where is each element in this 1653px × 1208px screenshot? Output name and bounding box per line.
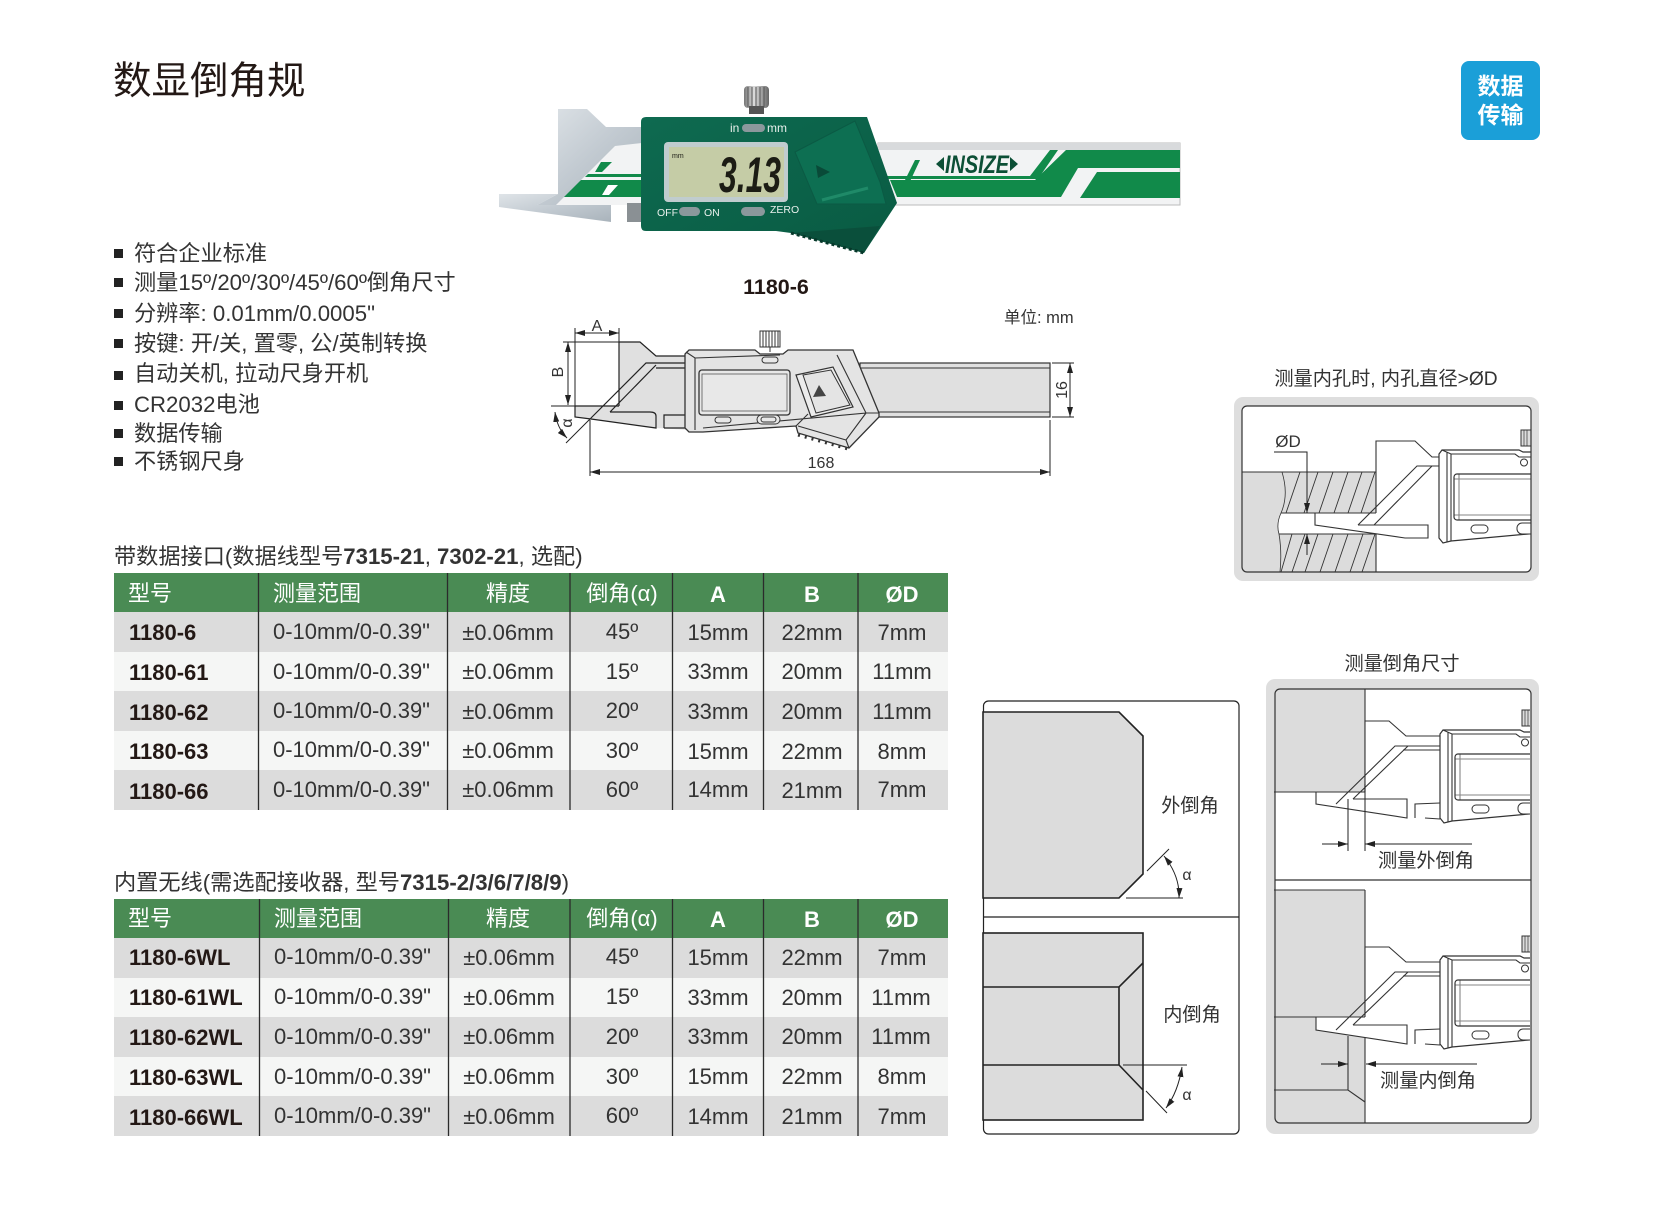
row 1180-63: 1180-63: [129, 739, 209, 764]
row 1180-66: 7mm: [878, 777, 926, 802]
panel: bore measurement: ØD: [1275, 432, 1301, 451]
LCD reading: 3.13: [719, 147, 781, 203]
table 2 header: 精度: [486, 906, 530, 931]
row 1180-66WL: ±0.06mm: [463, 1104, 555, 1129]
dimension drawing: A: [592, 318, 603, 335]
row 1180-66WL: 0-10mm/0-0.39": [274, 1103, 431, 1128]
feature list: 数据传输: [134, 421, 223, 446]
table 2 header: 倒角(α): [586, 906, 658, 931]
row 1180-6: 1180-6: [129, 620, 196, 645]
product photo: digital chamfer gauge: ON: [704, 207, 720, 219]
table caption 2: 内置无线(需选配接收器, 型号7315-2/3/6/7/8/9): [114, 870, 569, 895]
table 1 header: 精度: [486, 581, 530, 606]
row 1180-61WL: 15º: [606, 984, 638, 1009]
panel: outer and inner chamfer diagrams: α: [1182, 1087, 1192, 1104]
table 1: data interface models: [114, 573, 948, 810]
panel: outer and inner chamfer diagrams: α: [1182, 867, 1192, 884]
table 1 header: 倒角(α): [586, 581, 658, 606]
row 1180-66WL: 14mm: [687, 1104, 749, 1129]
row 1180-6: 45º: [606, 619, 638, 644]
row 1180-6: [129, 619, 926, 645]
row 1180-61: 20mm: [781, 659, 843, 684]
row 1180-62WL: ±0.06mm: [463, 1024, 555, 1049]
row 1180-62: 20º: [606, 698, 638, 723]
row 1180-66: 14mm: [687, 777, 749, 802]
row 1180-63WL: 22mm: [781, 1064, 843, 1089]
panel caption: bore measurement: 测量内孔时, 内孔直径>ØD: [1274, 368, 1498, 390]
label: measure outer chamfer: 测量外倒角: [1378, 850, 1474, 872]
label: outer chamfer: 外倒角: [1161, 795, 1219, 817]
row 1180-62: 20mm: [781, 699, 843, 724]
table 2 header: B: [804, 907, 820, 932]
dimension drawing: [550, 318, 1074, 476]
row 1180-6WL: 45º: [606, 944, 638, 969]
row 1180-62: 11mm: [872, 699, 932, 724]
row 1180-66: ±0.06mm: [462, 777, 554, 802]
feature list: 测量15º/20º/30º/45º/60º倒角尺寸: [134, 270, 456, 295]
table 2 header: A: [710, 907, 726, 932]
label: inner chamfer: 内倒角: [1163, 1004, 1221, 1026]
row 1180-61: 1180-61: [129, 660, 209, 685]
feature list: [114, 241, 456, 474]
table 1 header: A: [710, 582, 726, 607]
dimension drawing: 16: [1054, 381, 1071, 399]
row 1180-6WL: [129, 944, 926, 970]
product photo: digital chamfer gauge: mm: [672, 153, 684, 160]
title: 数显倒角规: [113, 60, 306, 103]
row 1180-6: ±0.06mm: [462, 620, 554, 645]
table 2 header: 测量范围: [274, 906, 362, 931]
label: measure inner chamfer: 测量内倒角: [1380, 1070, 1476, 1092]
row 1180-66: [129, 777, 926, 804]
feature list: 分辨率: 0.01mm/0.0005": [134, 301, 375, 326]
table 1 header: 测量范围: [273, 581, 361, 606]
row 1180-66: 60º: [606, 777, 638, 802]
product model label: 1180-6: [743, 275, 809, 299]
row 1180-63: 15mm: [687, 739, 749, 764]
row 1180-62WL: [129, 1024, 931, 1050]
dimension drawing: B: [550, 367, 567, 377]
row 1180-66: 0-10mm/0-0.39": [273, 777, 430, 802]
table 1 header: [128, 581, 918, 607]
row 1180-63: ±0.06mm: [462, 738, 554, 763]
row 1180-62: 33mm: [687, 699, 749, 724]
product photo: digital chamfer gauge: ZERO: [770, 204, 799, 216]
table 1 header: 型号: [128, 581, 172, 606]
row 1180-61: ±0.06mm: [462, 659, 554, 684]
row 1180-61WL: 1180-61WL: [129, 985, 243, 1010]
row 1180-6: 15mm: [687, 620, 749, 645]
row 1180-6WL: 7mm: [878, 945, 926, 970]
row 1180-62WL: 20mm: [781, 1024, 843, 1049]
product photo: digital chamfer gauge: in: [730, 121, 739, 135]
row 1180-61: [129, 659, 932, 685]
brand logo: INSIZE: [945, 151, 1010, 179]
row 1180-62WL: 33mm: [687, 1024, 749, 1049]
feature list: 不锈钢尺身: [134, 449, 245, 474]
row 1180-63WL: ±0.06mm: [463, 1064, 555, 1089]
feature list: 按键: 开/关, 置零, 公/英制转换: [134, 331, 427, 356]
badge: data transfer: [1461, 61, 1540, 140]
unit label: 单位: mm: [1004, 308, 1074, 327]
row 1180-66: 1180-66: [129, 779, 209, 804]
row 1180-61: 15º: [606, 659, 638, 684]
panel: measuring chamfer size: [1266, 679, 1540, 1134]
row 1180-62: 1180-62: [129, 700, 209, 725]
row 1180-63: 8mm: [878, 739, 926, 764]
dimension drawing: α: [559, 418, 576, 428]
product photo: digital chamfer gauge: mm: [767, 121, 787, 135]
row 1180-6: 7mm: [878, 620, 926, 645]
row 1180-62WL: 20º: [606, 1024, 638, 1049]
feature list: CR2032电池: [134, 392, 260, 417]
row 1180-63WL: 15mm: [687, 1064, 749, 1089]
row 1180-61: 33mm: [687, 659, 749, 684]
row 1180-63: 30º: [606, 738, 638, 763]
row 1180-66WL: 60º: [606, 1103, 638, 1128]
row 1180-61: 0-10mm/0-0.39": [273, 659, 430, 684]
row 1180-61WL: 11mm: [871, 985, 931, 1010]
row 1180-62WL: 0-10mm/0-0.39": [274, 1024, 431, 1049]
row 1180-66: 21mm: [781, 778, 843, 803]
row 1180-66WL: 1180-66WL: [129, 1105, 243, 1130]
row 1180-66WL: 7mm: [878, 1104, 926, 1129]
product photo: digital chamfer gauge: [499, 86, 1180, 253]
row 1180-62WL: 1180-62WL: [129, 1025, 243, 1050]
row 1180-6WL: 15mm: [687, 945, 749, 970]
row 1180-63WL: 8mm: [878, 1064, 926, 1089]
row 1180-6: 22mm: [781, 620, 843, 645]
product photo: digital chamfer gauge: OFF: [657, 207, 678, 219]
row 1180-6WL: 0-10mm/0-0.39": [274, 944, 431, 969]
row 1180-61WL: ±0.06mm: [463, 985, 555, 1010]
row 1180-6WL: 1180-6WL: [129, 945, 230, 970]
table 1 header: ØD: [886, 582, 918, 607]
panel: bore measurement: [1234, 397, 1539, 581]
row 1180-62: [129, 698, 932, 725]
row 1180-6: 0-10mm/0-0.39": [273, 619, 430, 644]
row 1180-62: 0-10mm/0-0.39": [273, 698, 430, 723]
badge: data transfer: 传输: [1478, 102, 1524, 128]
table 2: built-in wireless models: [114, 899, 948, 1136]
row 1180-63WL: 0-10mm/0-0.39": [274, 1064, 431, 1089]
table 2 header: ØD: [886, 907, 918, 932]
row 1180-61WL: 20mm: [781, 985, 843, 1010]
row 1180-6WL: 22mm: [781, 945, 843, 970]
row 1180-63WL: 1180-63WL: [129, 1065, 243, 1090]
panel caption: chamfer measuring: 测量倒角尺寸: [1344, 653, 1460, 675]
row 1180-63WL: 30º: [606, 1064, 638, 1089]
row 1180-62: ±0.06mm: [462, 699, 554, 724]
row 1180-61WL: 0-10mm/0-0.39": [274, 984, 431, 1009]
row 1180-62WL: 11mm: [871, 1024, 931, 1049]
row 1180-66WL: 21mm: [781, 1104, 843, 1129]
outer chamfer measurement: [1274, 689, 1540, 823]
row 1180-63: [129, 737, 926, 764]
table 2 header: [128, 906, 918, 932]
row 1180-6WL: ±0.06mm: [463, 945, 555, 970]
row 1180-63: 22mm: [781, 739, 843, 764]
row 1180-61WL: 33mm: [687, 985, 749, 1010]
panel: outer and inner chamfer diagrams: [983, 701, 1239, 1134]
feature list: 自动关机, 拉动尺身开机: [134, 361, 368, 386]
dimension drawing: 168: [808, 455, 834, 472]
table 2 header: 型号: [128, 906, 172, 931]
feature list: 符合企业标准: [134, 241, 267, 266]
row 1180-63: 0-10mm/0-0.39": [273, 737, 430, 762]
row 1180-66WL: [129, 1103, 926, 1130]
row 1180-63WL: [129, 1064, 926, 1090]
row 1180-61: 11mm: [872, 659, 932, 684]
badge: data transfer: 数据: [1478, 73, 1524, 99]
table 1 header: B: [804, 582, 820, 607]
row 1180-61WL: [129, 984, 931, 1010]
table caption 1: 带数据接口(数据线型号7315-21, 7302-21, 选配): [114, 544, 583, 569]
inner chamfer measurement: [1274, 890, 1540, 1123]
